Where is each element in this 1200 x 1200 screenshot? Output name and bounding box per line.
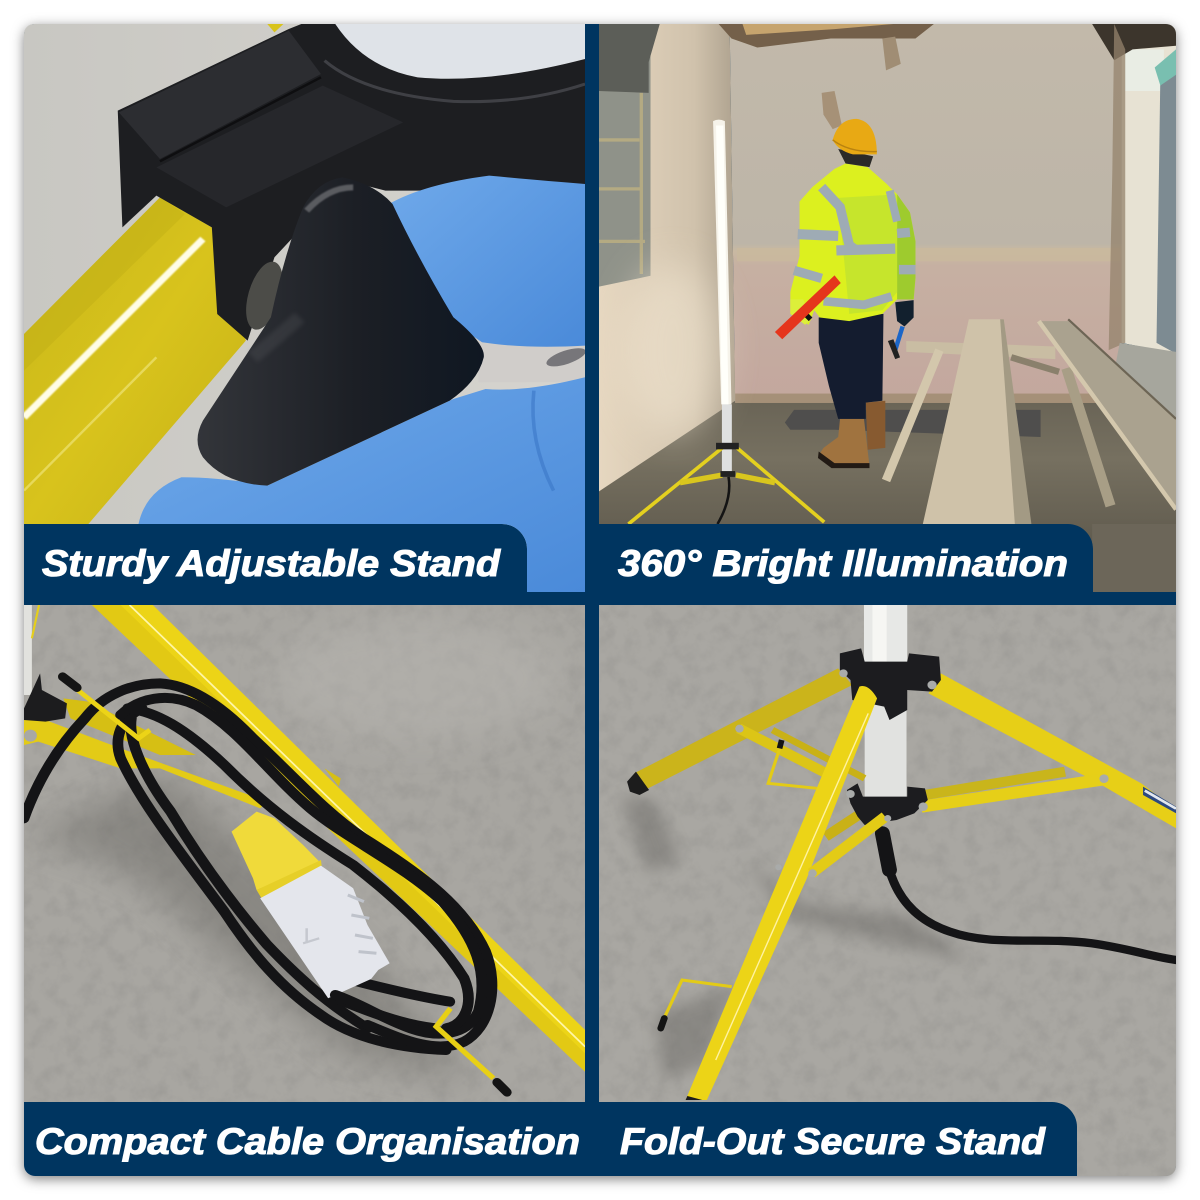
photo: lower cable strands bbox=[118, 708, 450, 1050]
photo: lamp tube bbox=[332, 22, 585, 79]
photo: struts bbox=[739, 728, 1104, 837]
photo: bolt bbox=[246, 262, 282, 330]
photo: worker bbox=[775, 119, 915, 468]
photo: right leg bbox=[929, 673, 1176, 828]
photo: lower clamp bbox=[847, 783, 928, 825]
photo: wire hook bottom bbox=[436, 1008, 507, 1092]
photo: small hook bbox=[768, 740, 817, 788]
caption: 360 bright illumination: 360° Bright Illumination bbox=[618, 543, 1068, 584]
photo: floor corner bbox=[1092, 530, 1176, 592]
photo: back wall bbox=[730, 24, 1122, 403]
photo: breeze blocks bbox=[599, 24, 660, 287]
photo: floor shadows bbox=[620, 797, 975, 1080]
photo: upper clamp bbox=[840, 648, 941, 720]
photo: floor shading bbox=[24, 618, 561, 1082]
photo: floor bbox=[599, 350, 1176, 548]
photo: bolts bbox=[735, 669, 1109, 877]
panel: compact cable organisation photo bbox=[24, 605, 585, 1102]
photo: black bracket and bolt bbox=[24, 673, 67, 742]
photo: trestles bbox=[886, 341, 1111, 506]
panel: fold-out secure stand photo bbox=[599, 600, 1176, 1176]
photo: background gap bbox=[478, 337, 585, 382]
photo: tower light bbox=[628, 120, 824, 524]
photo: front leg bbox=[686, 686, 877, 1100]
photo: rear left leg bbox=[627, 668, 852, 795]
caption: fold-out secure stand: Fold-Out Secure Stand bbox=[620, 1121, 1046, 1162]
photo: yellow struts bbox=[24, 698, 341, 808]
photo: power cable bbox=[882, 833, 1176, 960]
photo: rubbish on floor bbox=[785, 410, 1041, 437]
photo: left wall bbox=[599, 24, 735, 491]
photo: wire hook top bbox=[63, 677, 150, 738]
photo: wood planks bbox=[922, 318, 1176, 524]
photo: front strut bbox=[811, 817, 885, 873]
photo: black knob bbox=[198, 177, 484, 486]
caption: sturdy adjustable stand: Sturdy Adjustable Stand bbox=[42, 543, 501, 584]
photo: main yellow leg bbox=[92, 605, 585, 1072]
photo: yellow tube bbox=[24, 24, 283, 524]
panel: bright illumination photo bbox=[599, 24, 1177, 593]
photo: upper cable strands bbox=[24, 683, 492, 1047]
photo: lower hook bbox=[661, 980, 732, 1028]
photo: plug bbox=[232, 812, 390, 998]
panel: sturdy adjustable stand photo bbox=[24, 22, 588, 594]
photo: ceiling and rubble bbox=[719, 24, 934, 129]
photo: blue hand lower bbox=[138, 377, 585, 594]
photo: white pole bbox=[864, 600, 907, 800]
caption: compact cable organisation: Compact Cable Organisation bbox=[35, 1121, 580, 1162]
photo: blue finger upper bbox=[389, 176, 585, 347]
photo: black clamp bbox=[118, 24, 585, 341]
photo: doorway on right bbox=[1092, 24, 1176, 433]
photo: white pole and thin strut bbox=[24, 605, 39, 695]
